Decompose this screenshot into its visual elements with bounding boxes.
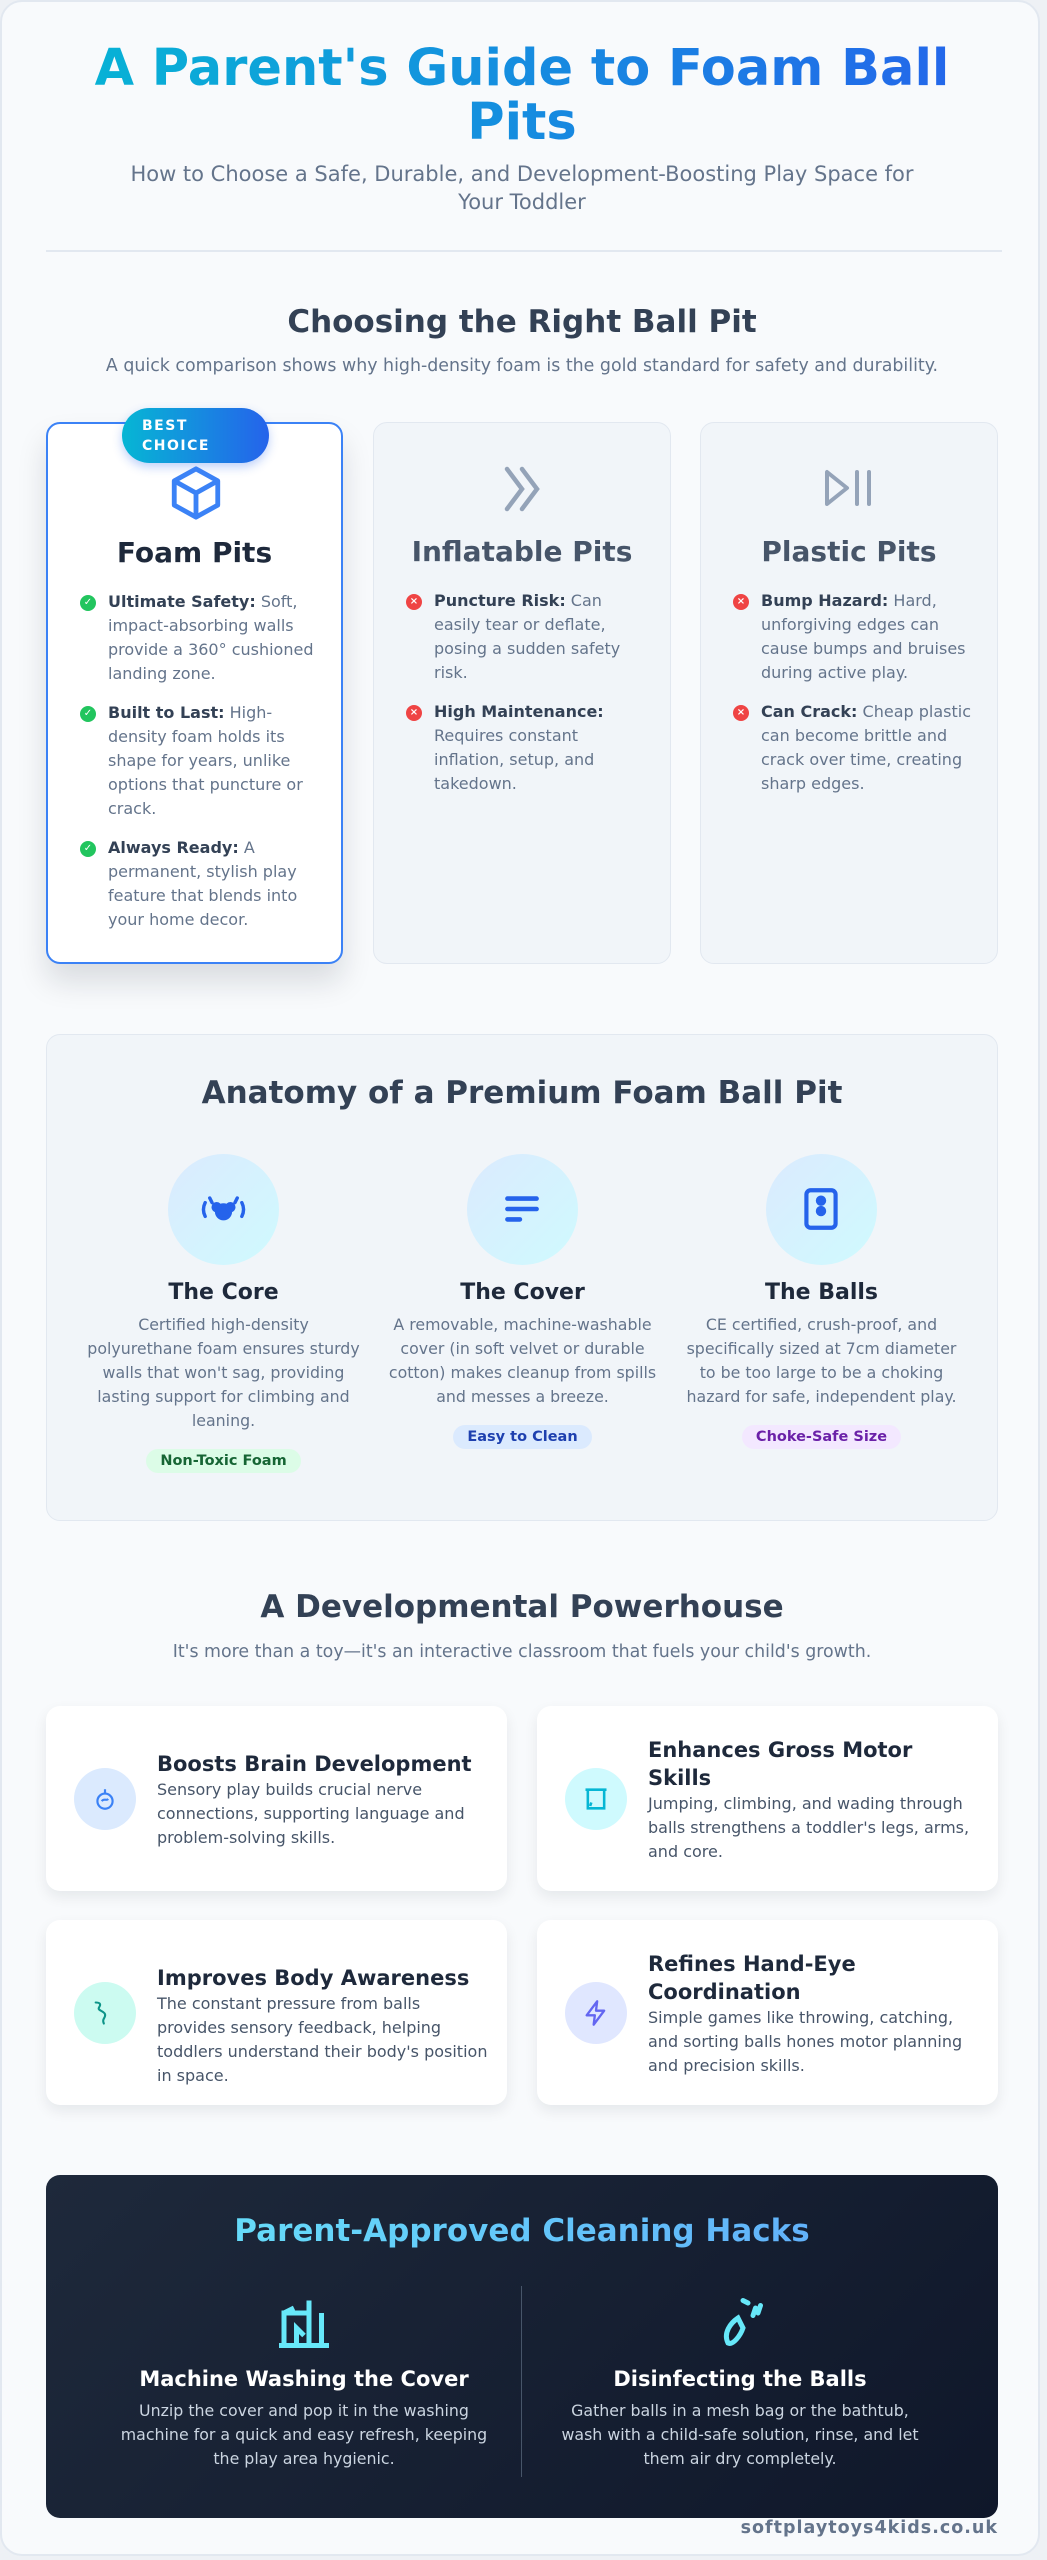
card: brain	[46, 1706, 507, 1891]
icon: cube	[172, 466, 220, 520]
card: brain: Boosts Brain Development	[157, 1752, 472, 1776]
panel: foam pits: ✓	[84, 708, 92, 719]
panel: foam pits: Always Ready: A permanent, stylish play feature that blends into your home decor.	[108, 838, 297, 929]
card title: Inflatable Pits	[412, 535, 632, 568]
card: gross motor: Enhances Gross Motor Skills	[648, 1738, 912, 1790]
column: machine washing	[121, 2367, 487, 2468]
icon: disinfect	[724, 2298, 763, 2346]
card: brain: Sensory play builds crucial nerve connections, supporting language and problem-solving skills.	[157, 1780, 465, 1847]
card: body awareness: The constant pressure from balls provides sensory feedback, helping toddlers understand their body's position in space.	[157, 1994, 487, 2085]
panel: foam pits: ✓	[84, 843, 92, 854]
panel: plastic pits: Can Crack: Cheap plastic can become brittle and crack over time, creating sharp edges.	[761, 702, 971, 793]
panel: inflatable pits: ×	[410, 707, 418, 718]
card: gross motor: Jumping, climbing, and wading through balls strengthens a toddler's legs, arms, and core.	[648, 1794, 969, 1861]
panel: plastic pits: ×	[737, 596, 745, 607]
column: core: The Core	[168, 1280, 279, 1305]
icon: brain	[74, 1768, 136, 1830]
column: disinfecting: Gather balls in a mesh bag or the bathtub, wash with a child-safe solution, rinse, and let them air dry completely.	[561, 2401, 919, 2468]
heading: choosing: Choosing the Right Ball Pit	[287, 304, 757, 340]
card: gross motor	[537, 1706, 998, 1891]
column: cover	[389, 1280, 656, 1449]
footer: website: softplaytoys4kids.co.uk	[741, 2518, 998, 2538]
panel: inflatable pits: High Maintenance: Requires constant inflation, setup, and takedown.	[434, 702, 604, 793]
icon: play pause	[825, 470, 871, 506]
panel: inflatable pits	[373, 422, 671, 964]
panel: foam pits: Built to Last: High-density foam holds its shape for years, unlike options that puncture or crack.	[108, 703, 303, 818]
column: machine washing: Machine Washing the Cover	[139, 2367, 469, 2391]
subtitle: How to Choose a Safe, Durable, and Development-Boosting Play Space for Your Toddler	[130, 162, 914, 214]
column: balls: The Balls	[765, 1280, 878, 1305]
heading: developmental: A Developmental Powerhouse	[260, 1589, 784, 1625]
column: core: Non-Toxic Foam	[160, 1453, 287, 1469]
list: pros: Ultimate Safety: Soft, impact-absorbing walls provide a 360° cushioned landing zone.	[108, 592, 313, 683]
card: body awareness: Improves Body Awareness	[157, 1966, 469, 1990]
title: A Parent's Guide to Foam Ball Pits	[95, 39, 949, 152]
badge: best choice: BEST	[142, 418, 188, 434]
column: balls: CE certified, crush-proof, and specifically sized at 7cm diameter to be too large to be a choking hazard for safe, independent play.	[686, 1315, 956, 1406]
column: core: Certified high-density polyurethane foam ensures sturdy walls that won't sag, providing lasting support for climbing and leaning.	[87, 1315, 360, 1430]
panel: foam pits: ✓	[84, 597, 92, 608]
column: balls	[686, 1280, 956, 1449]
icon: lightning	[565, 1982, 627, 2044]
list: cons: Puncture Risk: Can easily tear or deflate, posing a sudden safety risk.	[434, 591, 620, 682]
column: cover: Easy to Clean	[467, 1429, 578, 1445]
card: hand-eye	[537, 1920, 998, 2105]
subheading: developmental: It's more than a toy—it's an interactive classroom that fuels your child's growth.	[173, 1642, 871, 1662]
heading: cleaning	[46, 2213, 998, 2249]
panel: plastic pits: ×	[737, 707, 745, 718]
list: cons: Bump Hazard: Hard, unforgiving edges can cause bumps and bruises during active play.	[761, 591, 966, 682]
column: disinfecting	[561, 2367, 919, 2468]
heading: cleaning: Parent-Approved Cleaning Hacks	[234, 2213, 810, 2249]
card title: Foam Pits	[117, 536, 272, 569]
icon: motor	[565, 1768, 627, 1830]
column: disinfecting: Disinfecting the Balls	[613, 2367, 867, 2391]
card: hand-eye: Refines Hand-Eye Coordination	[648, 1952, 856, 2004]
column: balls: Choke-Safe Size	[756, 1429, 887, 1445]
panel: plastic pits	[700, 422, 998, 964]
column: cover: A removable, machine-washable cover (in soft velvet or durable cotton) makes cleanup from spills and messes a breeze.	[389, 1315, 656, 1406]
icon: body	[74, 1982, 136, 2044]
icon: cover	[467, 1154, 578, 1265]
icon: balls	[766, 1154, 877, 1265]
column: machine washing: Unzip the cover and pop it in the washing machine for a quick and easy refresh, keeping the play area hygienic.	[121, 2401, 487, 2468]
panel: anatomy	[46, 1034, 998, 1521]
heading: anatomy: Anatomy of a Premium Foam Ball Pit	[202, 1075, 842, 1111]
column: cover: The Cover	[460, 1280, 585, 1305]
card title: Plastic Pits	[761, 535, 937, 568]
card: body awareness	[46, 1920, 507, 2105]
card: hand-eye: Simple games like throwing, catching, and sorting balls hones motor planning and precision skills.	[648, 2008, 962, 2075]
badge: best choice: CHOICE	[142, 438, 210, 454]
icon: core	[168, 1154, 279, 1265]
column: core	[87, 1280, 360, 1473]
panel: inflatable pits: ×	[410, 596, 418, 607]
panel: foam pits	[46, 422, 343, 964]
subheading: choosing: A quick comparison shows why high-density foam is the gold standard for safety and durability.	[106, 356, 938, 376]
badge: best choice	[122, 408, 269, 463]
icon: washing	[279, 2300, 329, 2348]
panel: cleaning hacks	[46, 2175, 998, 2518]
icon: chevrons	[504, 466, 540, 512]
